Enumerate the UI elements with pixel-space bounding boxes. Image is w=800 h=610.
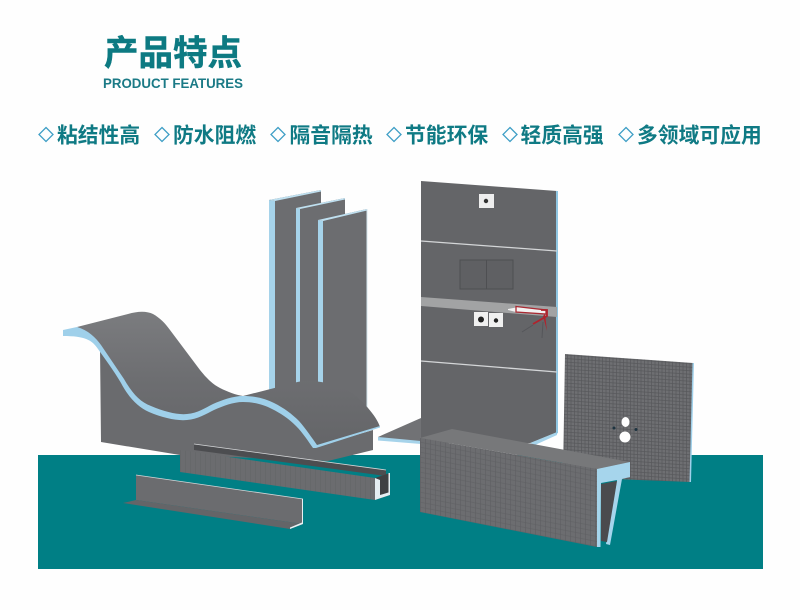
box front face [420,438,597,547]
recessed niche [460,260,513,289]
feature: 节能环保: 节能环保 [405,124,488,148]
drain holes [612,417,638,442]
seam lines [421,241,557,372]
top socket [479,194,494,208]
lower sockets [474,312,503,327]
feature: 多领域可应用: 多领域可应用 [637,124,762,148]
U channel profile [180,444,390,500]
title: PRODUCT FEATURES [103,75,243,91]
box top face [420,429,630,469]
feature: 轻质高强: 轻质高强 [520,124,604,148]
interior [601,481,617,542]
wall board [421,181,557,443]
three upright boards [269,190,368,420]
feature: 防水阻燃: 防水阻燃 [173,124,256,148]
grey joint band [421,297,557,317]
icon: caulking gun [508,306,547,338]
feature list [39,124,762,148]
lounge top surface [77,312,380,447]
curved lounge board [63,312,380,461]
meshed panel with toilet holes [563,354,694,482]
L angle profile [123,475,303,529]
lounge side wall [100,347,373,461]
teal floor band [38,455,763,569]
feature: 粘结性高: 粘结性高 [57,124,140,148]
title [103,35,243,91]
blue foam end [597,462,630,547]
lounge blue foam edge [63,327,380,448]
title: 产品特点 [104,35,242,73]
large standing backer panel [378,181,558,445]
boxed niche module [420,429,630,547]
floor board [378,418,557,443]
feature: 隔音隔热: 隔音隔热 [290,124,373,148]
